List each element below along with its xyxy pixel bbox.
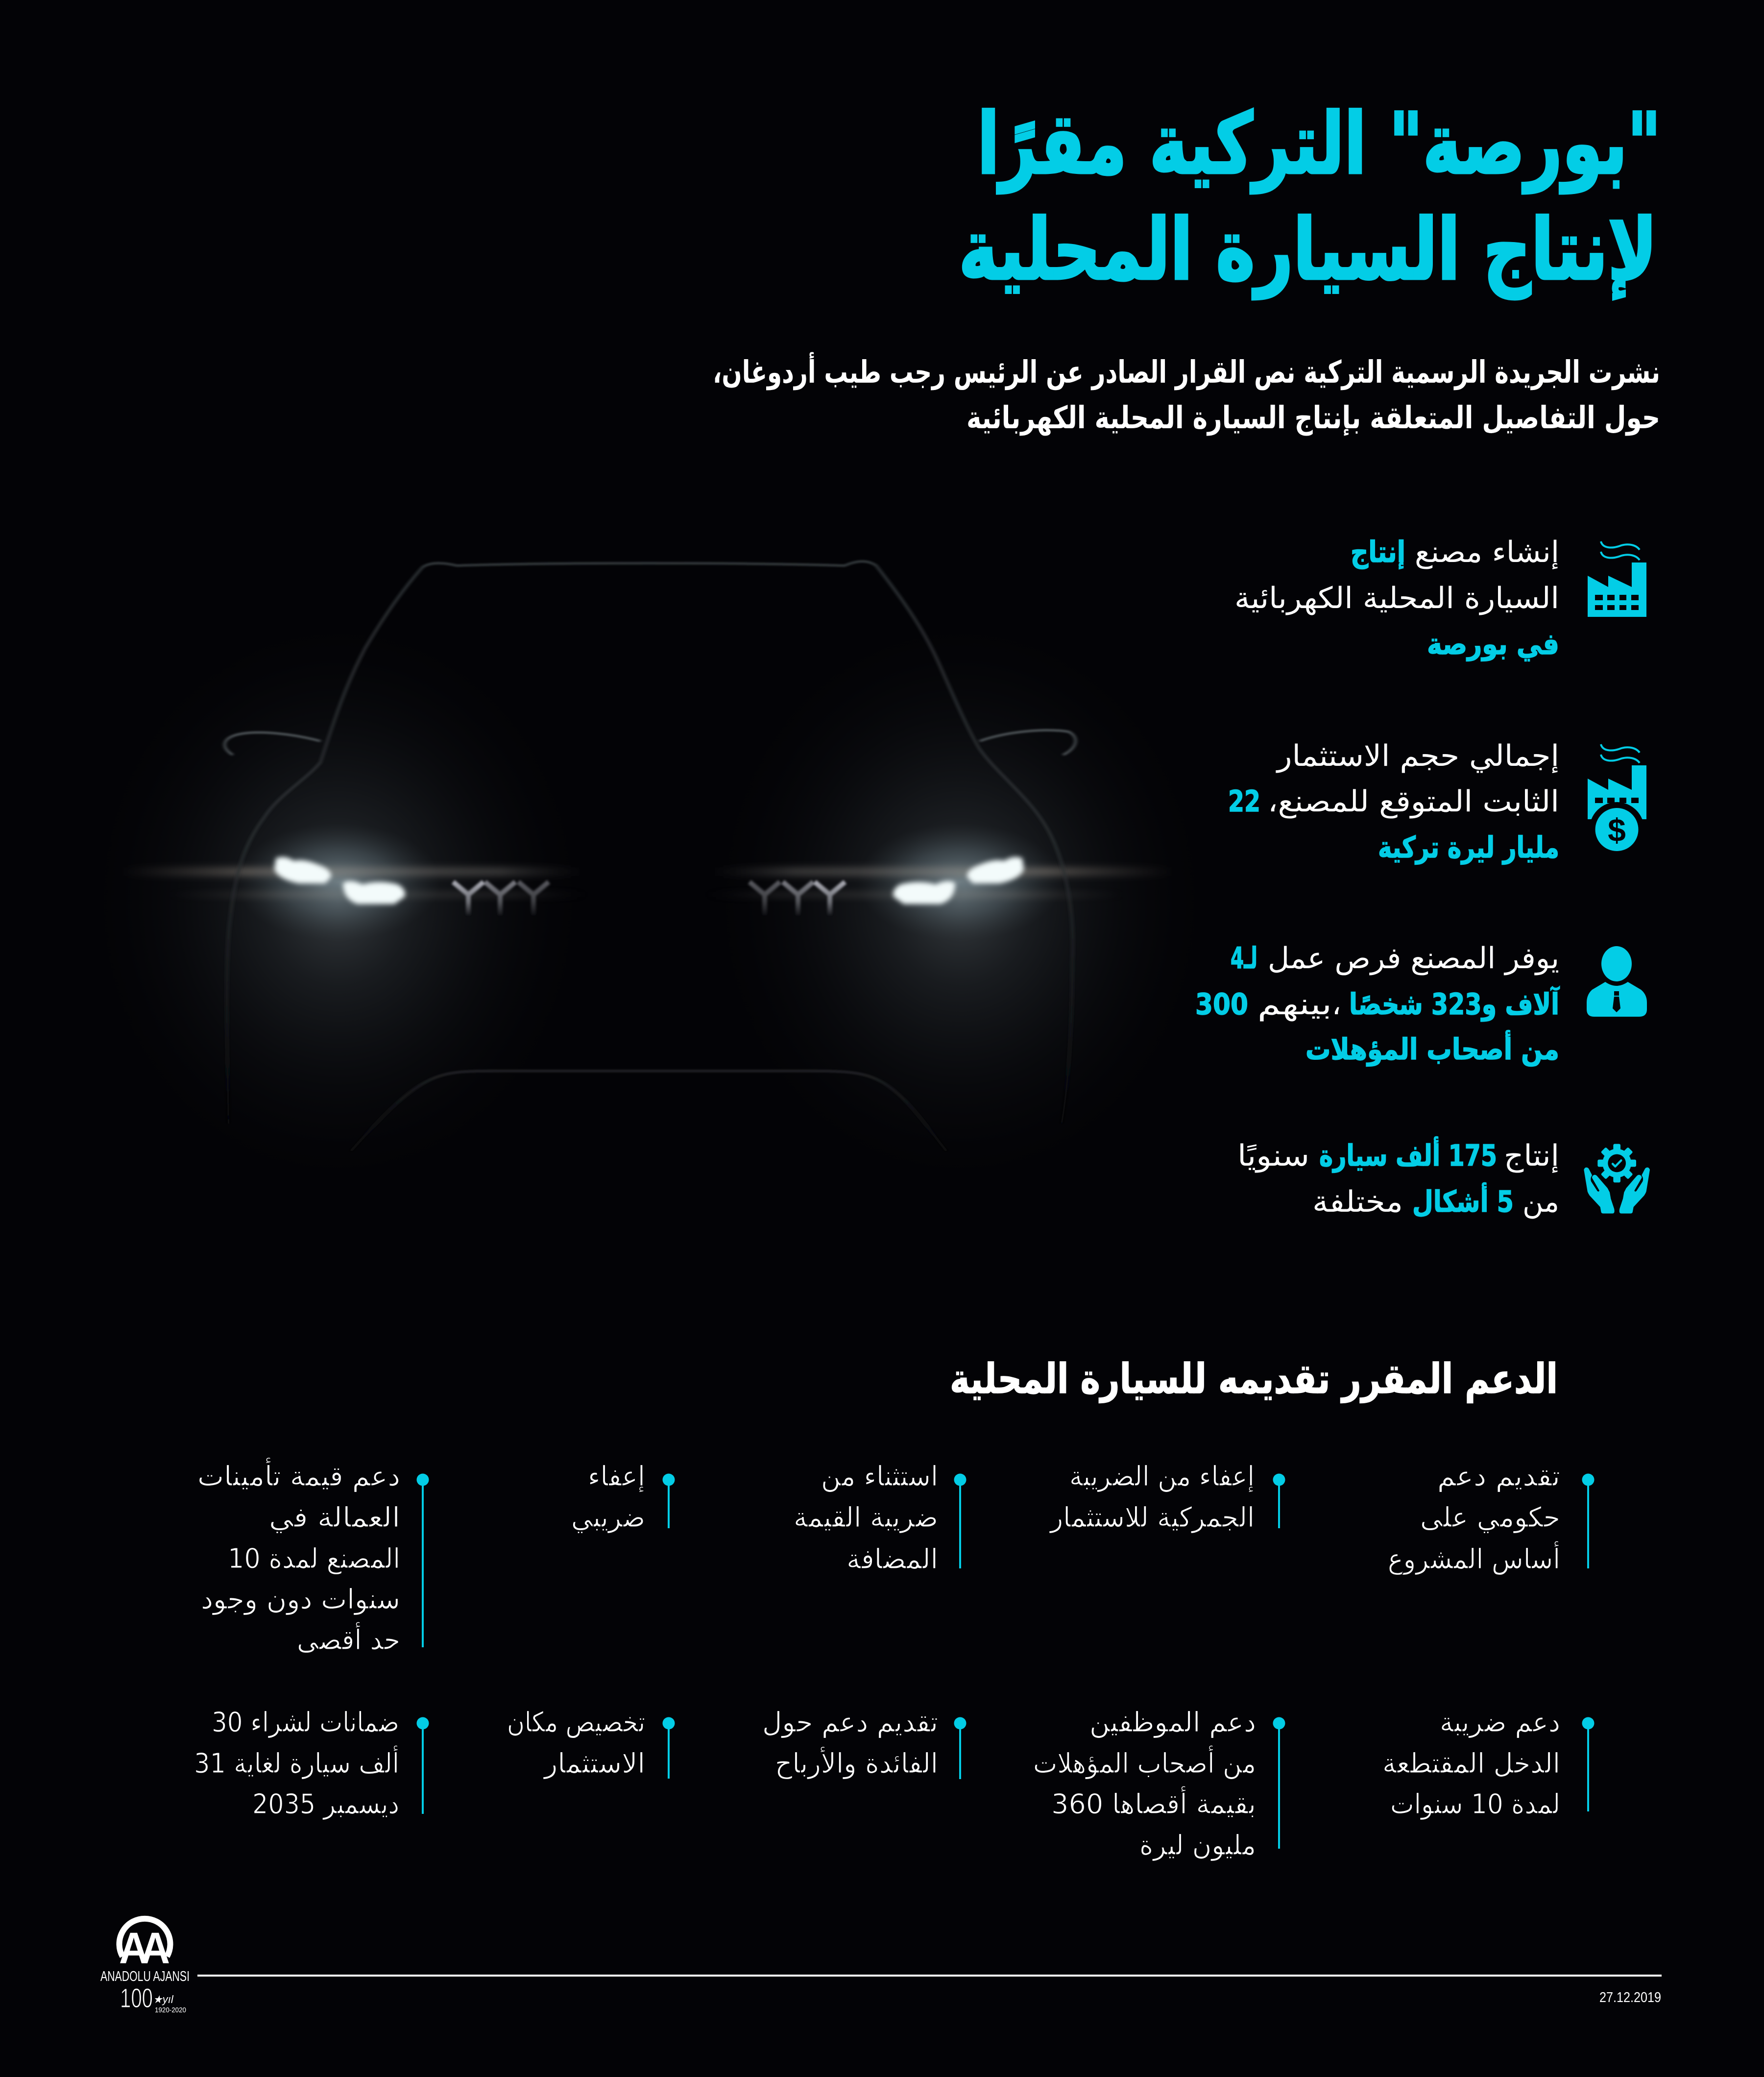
icon: factory — [1588, 541, 1646, 617]
text: jobs: بينهم — [1257, 987, 1332, 1022]
text: investment: إجمالي حجم الاستثمار — [1276, 739, 1559, 773]
intro text — [713, 352, 1660, 436]
support item 6 — [1382, 1707, 1594, 1820]
headlight glow — [93, 622, 1205, 1181]
support item 5 — [197, 1457, 429, 1656]
logo: Anadolu Ajansi: A — [141, 1924, 170, 1973]
right headlights — [893, 857, 1024, 904]
text: jobs: 300 — [1195, 987, 1248, 1022]
support item 6: دعم ضريبة — [1440, 1707, 1560, 1738]
support item 2 — [1049, 1461, 1285, 1534]
support item 3 — [794, 1461, 966, 1575]
icon: factory with coin: $ — [1608, 812, 1626, 848]
logo: Anadolu Ajansi: ★yıl — [153, 1993, 174, 2005]
footer rule — [197, 1975, 1662, 1977]
support item 5: العمالة في — [269, 1502, 400, 1534]
text: investment — [1228, 739, 1559, 865]
support item 3: ضريبة القيمة — [794, 1502, 938, 1534]
support item 6: لمدة 10 سنوات — [1390, 1788, 1560, 1820]
text: jobs — [1195, 941, 1560, 1067]
car silhouette outline — [225, 562, 1076, 1151]
support item 6: الدخل المقتطعة — [1382, 1748, 1560, 1780]
support item 7: بقيمة أقصاها 360 — [1051, 1786, 1256, 1820]
support item 10: ضمانات لشراء 30 — [212, 1707, 399, 1738]
date: 27.12.2019 — [1599, 1990, 1661, 2005]
support item 2: إعفاء من الضريبة — [1069, 1461, 1255, 1493]
icon: factory with coin — [1588, 744, 1646, 857]
text: jobs: يوفر المصنع فرص عمل — [1268, 941, 1559, 976]
fact: production — [1237, 1136, 1650, 1219]
title — [959, 95, 1661, 299]
logo: Anadolu Ajansi — [100, 1919, 190, 2014]
text: factory: إنشاء مصنع — [1415, 535, 1559, 569]
left headlights — [274, 857, 405, 904]
support item 1: أساس المشروع — [1388, 1541, 1560, 1575]
support item 7: من أصحاب المؤهلات — [1033, 1745, 1256, 1780]
support item 9: تخصيص مكان — [507, 1707, 645, 1738]
support item 4: إعفاء — [588, 1461, 645, 1493]
text: production: مختلفة — [1312, 1185, 1403, 1219]
support item 8 — [762, 1707, 966, 1780]
support item 1 — [1388, 1461, 1594, 1575]
text: investment: 22 — [1228, 784, 1260, 819]
logo: Anadolu Ajansi: ANADOLU AJANSI — [100, 1969, 190, 1984]
text: investment: مليار ليرة تركية — [1378, 831, 1559, 865]
support item 10: ألف سيارة لغاية 31 — [194, 1745, 399, 1780]
text: production: إنتاج — [1504, 1139, 1559, 1173]
support item 7 — [1033, 1707, 1285, 1861]
logo: Anadolu Ajansi: 1920-2020 — [155, 2006, 186, 2014]
support heading: الدعم المقرر تقديمه للسيارة المحلية — [950, 1355, 1558, 1403]
text: production: 5 أشكال — [1412, 1182, 1514, 1219]
icon: person — [1587, 946, 1647, 1017]
support item 3: المضافة — [846, 1543, 938, 1575]
support item 5: سنوات دون وجود — [201, 1584, 400, 1615]
logo: Anadolu Ajansi: 100 — [120, 1982, 153, 2013]
text: production: من — [1522, 1185, 1559, 1219]
text: jobs: آلاف و323 شخصًا — [1349, 986, 1560, 1022]
support item 1: حكومي على — [1420, 1502, 1560, 1534]
fact: jobs — [1195, 941, 1647, 1067]
text: jobs: ، — [1332, 987, 1341, 1022]
support item 8: تقديم دعم حول — [762, 1707, 938, 1738]
text: production: 175 ألف سيارة — [1319, 1136, 1497, 1173]
support item 7: مليون ليرة — [1139, 1830, 1256, 1861]
support item 4 — [571, 1461, 675, 1534]
support item 4: ضريبي — [571, 1502, 645, 1534]
text: factory: السيارة المحلية الكهربائية — [1234, 581, 1559, 615]
text: factory: في بورصة — [1427, 627, 1559, 661]
text: factory: إنتاج — [1351, 535, 1405, 569]
support item 2: الجمركية للاستثمار — [1049, 1502, 1255, 1534]
support item 9 — [507, 1707, 675, 1780]
logo: Anadolu Ajansi: A — [119, 1924, 148, 1973]
support item 10 — [194, 1707, 429, 1820]
text: production — [1237, 1136, 1559, 1219]
fact: investment — [1228, 739, 1646, 865]
support item 8: الفائدة والأرباح — [775, 1746, 938, 1780]
support item 9: الاستثمار — [543, 1748, 645, 1780]
text: jobs: من أصحاب المؤهلات — [1305, 1030, 1559, 1067]
grille logo marks — [453, 882, 845, 915]
support item 5: حد أقصى — [297, 1622, 400, 1656]
fact: factory — [1234, 535, 1646, 661]
text: production: سنويًا — [1237, 1139, 1309, 1173]
support item 5: المصنع لمدة 10 — [228, 1543, 400, 1575]
support item 1: تقديم دعم — [1437, 1461, 1560, 1492]
support item 7: دعم الموظفين — [1089, 1707, 1256, 1738]
text: factory — [1234, 535, 1559, 661]
support item 10: ديسمبر 2035 — [252, 1788, 399, 1820]
support item 3: استثناء من — [821, 1461, 938, 1492]
support item 5: دعم قيمة تأمينات — [197, 1457, 400, 1492]
text: jobs: لـ4 — [1231, 941, 1257, 976]
text: investment: الثابت المتوقع للمصنع، — [1268, 784, 1559, 819]
icon: gear in hands — [1584, 1144, 1650, 1214]
car headlights image — [93, 562, 1205, 1181]
